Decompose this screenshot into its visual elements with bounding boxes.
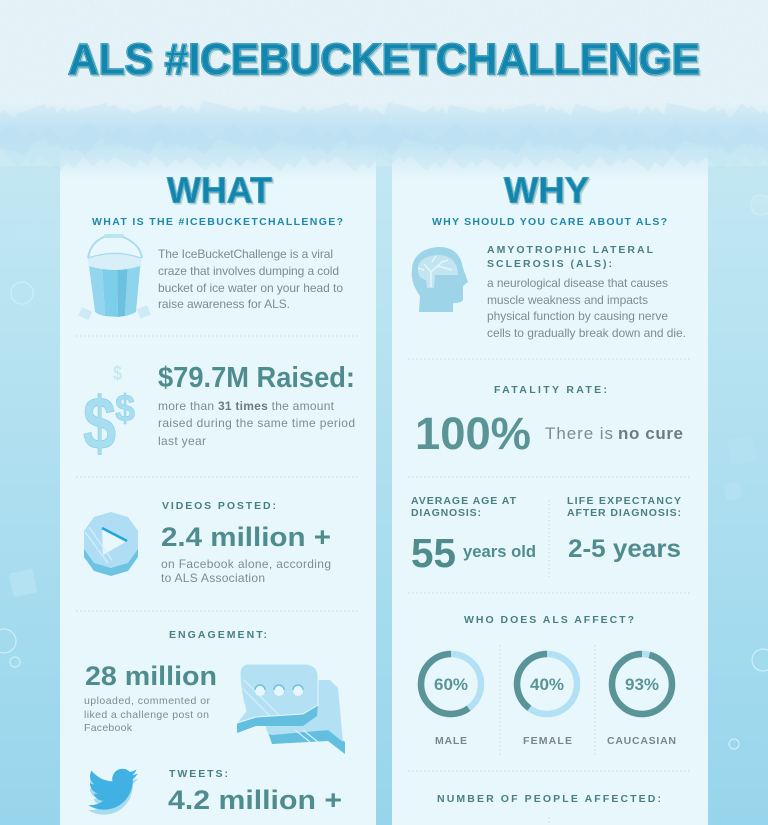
title: ALS #ICEBUCKETCHALLENGE (68, 35, 700, 84)
donut chart: female 40%: FEMALE (523, 735, 572, 747)
text: ALS definition: muscle weakness and impacts (487, 293, 648, 307)
icon: ice play button (84, 512, 138, 576)
stat: average age at diagnosis: DIAGNOSIS: (411, 507, 481, 519)
text: ice bucket description: bucket of ice water on your head to (158, 281, 343, 295)
stat: fatality rate: no cure (618, 424, 683, 443)
stat: average age at diagnosis (411, 495, 536, 576)
stat: engagement: 28 million (85, 661, 217, 691)
panel: why (392, 150, 708, 825)
donut chart: male 60% (421, 654, 481, 747)
heading: what: WHAT (167, 170, 272, 210)
subheading: what: WHAT IS THE #ICEBUCKETCHALLENGE? (92, 216, 343, 228)
stat: life expectancy: LIFE EXPECTANCY (567, 495, 681, 507)
icon: dollar signs (83, 363, 135, 465)
stat: videos posted (161, 500, 331, 585)
text: ALS definition: cells to gradually break down and die. (487, 326, 686, 340)
text: ice bucket description (158, 247, 343, 311)
stat: fatality rate (415, 384, 683, 459)
stat: raised: more than 31 times the amount (158, 399, 335, 413)
icon: ice chat bubbles (237, 664, 345, 754)
panel: what (60, 150, 376, 825)
stat: average age at diagnosis: years old (463, 542, 536, 561)
text: ALS definition: SCLEROSIS (ALS): (487, 258, 612, 270)
stat: tweets (168, 768, 342, 815)
donut chart: male 60%: MALE (435, 735, 467, 747)
melting ice cube band (0, 100, 768, 172)
stat: average age at diagnosis: 55 (411, 530, 456, 576)
donut chart: caucasian 93%: 93% (625, 675, 659, 694)
text: ALS definition: physical function by causing nerve (487, 309, 668, 323)
stat: tweets: 4.2 million + (168, 785, 342, 815)
stat: average age at diagnosis: AVERAGE AGE AT (411, 495, 517, 507)
heading: why: WHY (504, 170, 589, 210)
stat: raised: raised during the same time period (158, 416, 355, 430)
icon: dollar signs: $ (115, 388, 135, 430)
stat: fatality rate: 100% (415, 408, 531, 459)
stat: engagement: Facebook (84, 722, 133, 734)
heading: who does ALS affect: WHO DOES ALS AFFECT? (464, 614, 634, 626)
subheading: why: WHY SHOULD YOU CARE ABOUT ALS? (432, 216, 667, 228)
text: ALS definition (487, 244, 686, 340)
icon: twitter bird (88, 769, 138, 815)
donut chart: caucasian 93%: CAUCASIAN (607, 735, 676, 747)
stat: raised: last year (158, 434, 206, 448)
donut chart: caucasian 93% (607, 654, 676, 747)
text: ice bucket description: The IceBucketChallenge is a viral (158, 247, 333, 261)
stat: engagement: ENGAGEMENT: (169, 629, 267, 641)
stat: fatality rate: FATALITY RATE: (494, 384, 607, 396)
stat: fatality rate: There is (545, 424, 613, 443)
stat: life expectancy (567, 495, 681, 563)
stat: videos posted: to ALS Association (161, 571, 265, 585)
stat: videos posted: on Facebook alone, according (161, 557, 331, 571)
stat: videos posted: VIDEOS POSTED: (162, 500, 276, 512)
stat: engagement: uploaded, commented or (84, 695, 210, 707)
donut chart: female 40% (517, 654, 577, 747)
heading: number of people affected: NUMBER OF PEOPLE AFFECTED: (437, 793, 661, 805)
text: ice bucket description: craze that involves dumping a cold (158, 264, 339, 278)
icon: dollar signs: $ (113, 363, 122, 385)
stat: videos posted: 2.4 million + (161, 522, 331, 552)
stat: life expectancy: AFTER DIAGNOSIS: (567, 507, 681, 519)
side decorations: ice cubes and bubbles (0, 195, 768, 749)
title: ALS #ICEBUCKETCHALLENGE (70, 36, 702, 86)
stat: life expectancy: 2-5 years (568, 535, 681, 563)
heading: why: WHY (504, 170, 589, 210)
stat: engagement: liked a challenge post on (84, 709, 209, 721)
text: ALS definition: a neurological disease that causes (487, 276, 668, 290)
heading: what: WHAT (168, 171, 274, 212)
donut chart: male 60%: 60% (434, 675, 468, 694)
icon: dollar signs: $ (83, 382, 116, 465)
stat: raised (158, 362, 355, 448)
stat: raised: $79.7M Raised: (158, 362, 355, 394)
heading: what: WHAT (167, 170, 272, 210)
stat: tweets: TWEETS: (169, 768, 228, 780)
donut chart: female 40%: 40% (530, 675, 564, 694)
title: ALS #ICEBUCKETCHALLENGE (68, 35, 700, 84)
icon: head with brain (412, 247, 468, 312)
stat: engagement (84, 629, 267, 734)
icon: ice bucket (78, 234, 151, 320)
text: ALS definition: AMYOTROPHIC LATERAL (487, 244, 654, 256)
text: ice bucket description: raise awareness for ALS. (158, 297, 290, 311)
heading: why: WHY (506, 171, 590, 212)
